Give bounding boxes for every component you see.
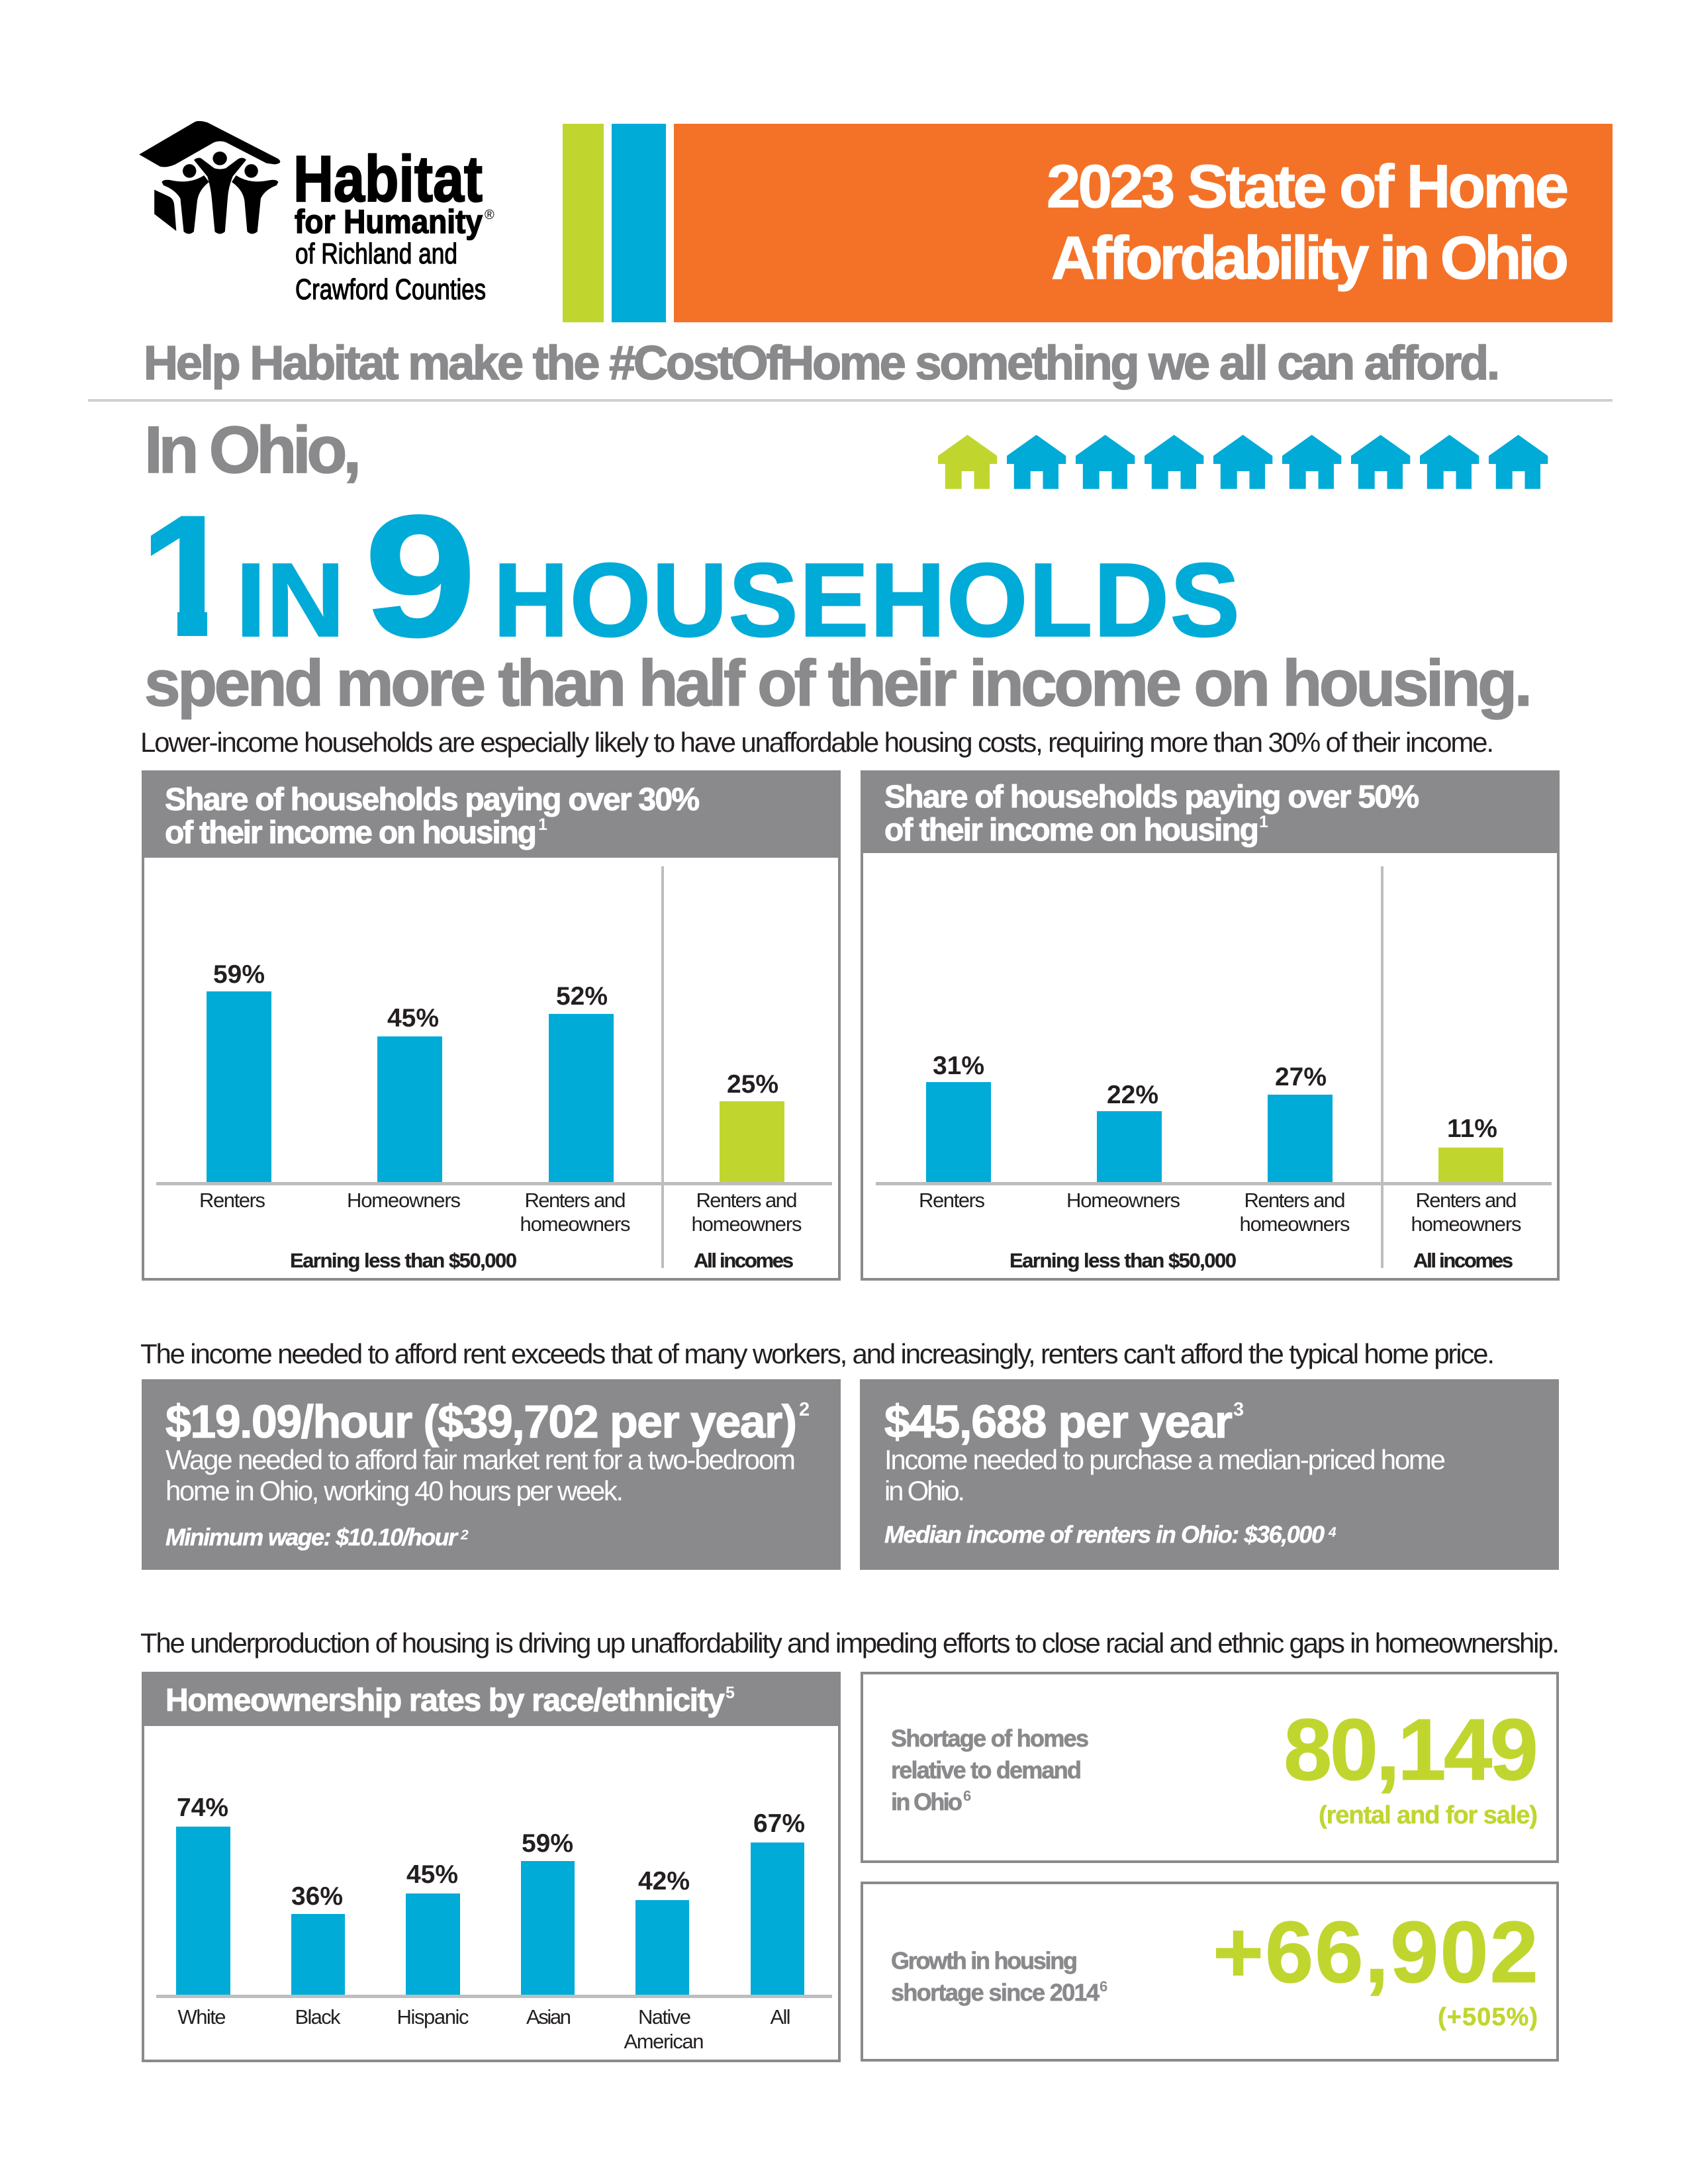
callout: wage needed for rent: [142, 1379, 841, 1570]
panel header: Share of households paying over 30%: [165, 782, 700, 817]
bar chart: over 50%: 11%: [1447, 1115, 1497, 1143]
title text: [1047, 153, 1569, 292]
bar chart: race and ethnicity: 74%: [177, 1794, 228, 1822]
heading: In Ohio: In Ohio,: [144, 413, 361, 487]
headline: 1 in 9 households: [151, 514, 1237, 638]
callout: income to purchase a home: in Ohio.: [884, 1475, 965, 1506]
stat panel: growth in shortage: [862, 1883, 1558, 2060]
headline: 1 in 9 households: 9: [364, 479, 477, 673]
panel header: [142, 770, 841, 858]
logo: Habitat for Humanity: [139, 121, 494, 306]
stat panel: growth in shortage: +66,902: [1213, 1903, 1538, 2001]
bar chart: race and ethnicity: 36%: [291, 1882, 343, 1911]
bar chart: race and ethnicity: [156, 1794, 832, 2053]
stat panel: growth in shortage: shortage since 2014: [891, 1979, 1100, 2006]
bar chart: over 50%: homeowners: [1411, 1212, 1521, 1236]
bar chart: over 30%: Renters and: [696, 1189, 797, 1212]
panel header: Homeownership rates by race/ethnicity: [165, 1683, 725, 1718]
intro sentence: Lower-income households are especially likely to have unaffordable housing costs, requiring more than 30% of their income.: [140, 727, 1494, 758]
section sentence: underproduction: The underproduction of housing is driving up unaffordability and impeding efforts to close racial and ethnic gaps in homeownership.: [140, 1627, 1560, 1659]
stat panel: housing shortage: 6: [963, 1788, 971, 1804]
logo wordmark: [293, 142, 494, 306]
section sentence: income needed: The income needed to afford rent exceeds that of many workers, and increasingly, renters can't afford the typical home price.: [140, 1338, 1495, 1369]
stat panel: housing shortage: [862, 1673, 1558, 1862]
headline: 1 in 9 households: 1: [140, 479, 236, 673]
bar chart: over 30%: [156, 866, 832, 1272]
callout: income to purchase a home: Median income of renters in Ohio: $36,000: [884, 1521, 1325, 1548]
logo wordmark: Habitat: [293, 142, 483, 215]
panel: share paying over 50%: [861, 770, 1560, 1279]
logo wordmark: ®: [485, 208, 494, 222]
bar chart: over 30%: 25%: [727, 1070, 778, 1099]
bar chart: race and ethnicity: Asian: [526, 2005, 571, 2028]
stat panel: housing shortage: Shortage of homes: [891, 1725, 1089, 1752]
panel header: 1: [538, 815, 547, 834]
bar chart: race and ethnicity: All: [771, 2005, 790, 2028]
callout: income to purchase a home: Income needed to purchase a median-priced home: [884, 1444, 1446, 1475]
callout: wage needed for rent: Wage needed to afford fair market rent for a two-bedroom: [165, 1444, 796, 1475]
icon row: 1 in 9 houses: [938, 435, 1548, 489]
panel header: [142, 1672, 841, 1726]
panel header: Share of households paying over 50%: [884, 780, 1419, 815]
stat panel: growth in shortage: Growth in housing: [891, 1947, 1078, 1974]
bar chart: over 50%: Renters and: [1415, 1189, 1517, 1212]
headline: 1 in 9 households: HOUSEHOLDS: [493, 542, 1240, 659]
logo wordmark: of Richland and: [295, 238, 457, 270]
panel header: 1: [1259, 813, 1268, 831]
bar chart: over 30%: Earning less than $50,000: [290, 1249, 517, 1272]
bar chart: race and ethnicity: Hispanic: [397, 2005, 469, 2028]
bar chart: race and ethnicity: White: [177, 2005, 226, 2028]
bar chart: over 50%: 22%: [1107, 1081, 1158, 1109]
stat panel: housing shortage: 80,149: [1284, 1701, 1538, 1798]
bar chart: race and ethnicity: 42%: [638, 1867, 690, 1895]
bar chart: over 30%: Homeowners: [347, 1189, 461, 1212]
bar chart: race and ethnicity: Native: [638, 2005, 691, 2028]
panel header: of their income on housing: [884, 813, 1259, 848]
subheadline: spend more than half of their income on housing.: [144, 647, 1532, 719]
panel: homeownership rates by race: [142, 1672, 841, 2061]
bar chart: over 50%: [876, 866, 1552, 1272]
bar chart: over 50%: Homeowners: [1066, 1189, 1180, 1212]
stat panel: housing shortage: in Ohio: [891, 1788, 962, 1815]
bar chart: race and ethnicity: 59%: [522, 1829, 573, 1858]
logo wordmark: for Humanity: [295, 203, 483, 240]
stat panel: growth in shortage: 6: [1100, 1978, 1107, 1995]
bar chart: over 50%: homeowners: [1239, 1212, 1350, 1236]
title text: 2023 State of Home: [1047, 153, 1569, 220]
panel: share paying over 30%: [142, 770, 841, 1279]
callout: income to purchase a home: $45,688 per year: [884, 1396, 1233, 1447]
bar chart: over 30%: All incomes: [694, 1249, 794, 1272]
stat panel: housing shortage: relative to demand: [891, 1756, 1082, 1784]
callout: wage needed for rent: 2: [799, 1399, 810, 1420]
title banner: colour bars and orange block: [563, 124, 1613, 322]
callout: income to purchase a home: 4: [1328, 1525, 1336, 1540]
panel header: of their income on housing: [165, 815, 537, 850]
bar chart: over 30%: 52%: [556, 982, 608, 1011]
bar chart: over 30%: 45%: [387, 1004, 439, 1032]
panel header: 5: [726, 1684, 735, 1702]
bar chart: race and ethnicity: 67%: [753, 1809, 805, 1838]
title text: Affordability in Ohio: [1051, 224, 1569, 292]
bar chart: over 50%: All incomes: [1413, 1249, 1513, 1272]
bar chart: over 50%: 31%: [933, 1052, 984, 1080]
tagline: Help Habitat make the #CostOfHome something we all can afford.: [144, 337, 1500, 390]
bar chart: over 50%: Renters: [919, 1189, 985, 1212]
bar chart: race and ethnicity: 45%: [406, 1860, 458, 1889]
bar chart: over 50%: 27%: [1275, 1063, 1327, 1091]
headline: 1 in 9 households: IN: [236, 542, 345, 659]
bar chart: over 50%: Earning less than $50,000: [1009, 1249, 1237, 1272]
stat panel: growth in shortage: (+505%): [1438, 2003, 1538, 2031]
callout: income to purchase a home: 3: [1233, 1399, 1244, 1420]
bar chart: over 30%: homeowners: [691, 1212, 802, 1236]
bar chart: over 30%: 59%: [213, 960, 265, 989]
bar chart: race and ethnicity: American: [624, 2030, 704, 2053]
callout: wage needed for rent: 2: [460, 1527, 469, 1543]
bar chart: over 30%: homeowners: [520, 1212, 630, 1236]
callout: wage needed for rent: Minimum wage: $10.10/hour: [165, 1524, 459, 1551]
bar chart: over 30%: Renters and: [524, 1189, 626, 1212]
logo wordmark: Crawford Counties: [295, 273, 486, 306]
callout: wage needed for rent: $19.09/hour ($39,702 per year): [165, 1396, 797, 1447]
stat panel: housing shortage: (rental and for sale): [1319, 1801, 1538, 1829]
callout: income to purchase a home: [860, 1379, 1559, 1570]
bar chart: over 30%: Renters: [199, 1189, 265, 1212]
callout: wage needed for rent: home in Ohio, working 40 hours per week.: [165, 1475, 624, 1506]
bar chart: over 50%: Renters and: [1244, 1189, 1345, 1212]
bar chart: race and ethnicity: Black: [295, 2005, 341, 2028]
panel header: [861, 770, 1560, 853]
icon: house and people mark: [139, 121, 280, 234]
